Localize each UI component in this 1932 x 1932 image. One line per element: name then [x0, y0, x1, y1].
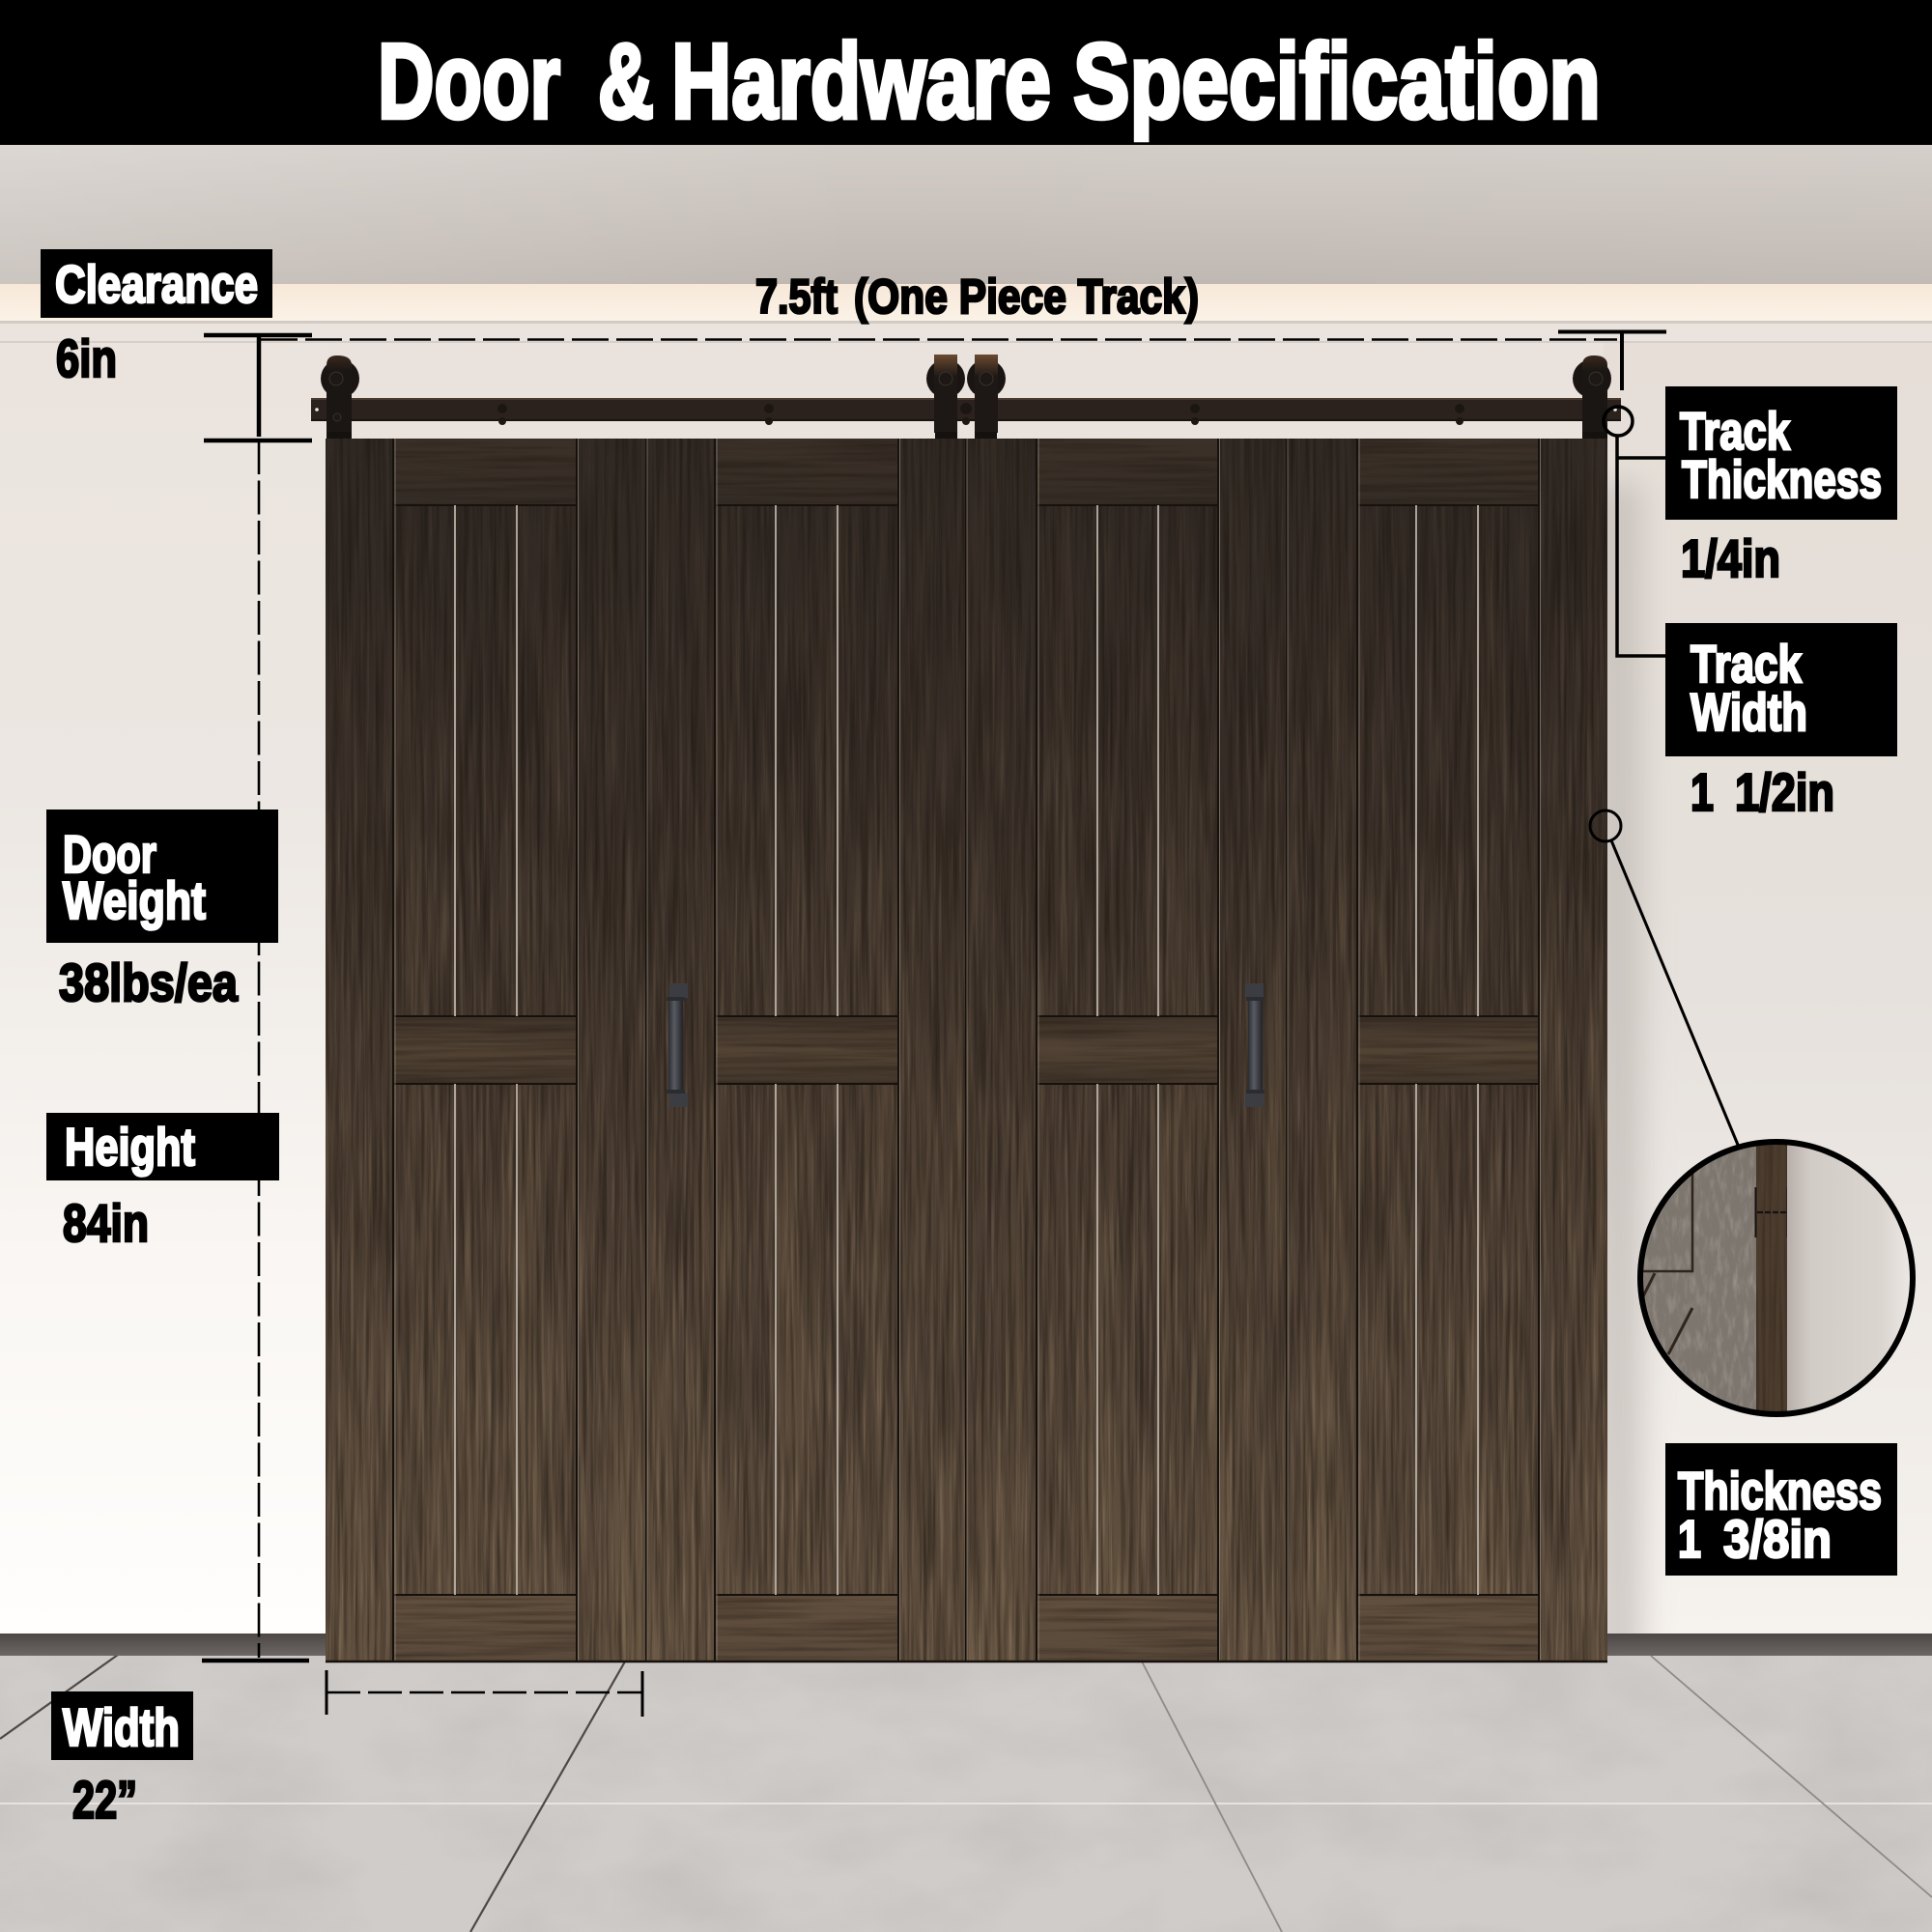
- track length label: [755, 270, 1199, 324]
- label: thickness: Thickness: [1678, 1461, 1882, 1520]
- label: track width: Track: [1690, 634, 1802, 694]
- value: height: 84in: [63, 1193, 149, 1253]
- label: height: [46, 1113, 279, 1180]
- icon: hanger 4: [1573, 355, 1611, 439]
- track length label: (One Piece Track): [854, 270, 1199, 324]
- value: track width: 1: [1690, 762, 1714, 822]
- track length dimension line: [261, 332, 1666, 390]
- label: track thickness: Track: [1680, 401, 1790, 461]
- baseboard: [0, 1634, 1932, 1656]
- label: door weight: Weight: [63, 870, 206, 930]
- value: track thickness: 1/4in: [1681, 528, 1780, 588]
- barn door track: [311, 398, 1621, 425]
- icon: hanger 1: [321, 355, 359, 439]
- label: door weight: Door: [63, 824, 156, 884]
- door 1: [393, 439, 647, 1662]
- title: Hardware: [671, 22, 1051, 141]
- track length label: 7.5ft: [755, 270, 838, 324]
- magnified door edge: [1756, 1139, 1787, 1417]
- magnified wall: [1787, 1146, 1901, 1410]
- clearance dimension line: [204, 335, 312, 440]
- label: thickness: 1: [1678, 1509, 1701, 1569]
- value: track width: 1/2in: [1735, 762, 1834, 822]
- track detail callout circle and connectors: [1604, 407, 1665, 656]
- label: height: Height: [65, 1117, 195, 1177]
- value: door weight: 38lbs/ea: [59, 952, 238, 1012]
- label: width: Width: [63, 1697, 180, 1757]
- door 2: [715, 439, 967, 1662]
- label: track width: Width: [1690, 682, 1807, 742]
- value: width: 22”: [72, 1770, 137, 1830]
- door thickness magnified detail: [1633, 1139, 1918, 1417]
- label: door weight: [46, 810, 278, 943]
- door 3: [1037, 439, 1288, 1662]
- door wood surface: [326, 439, 1607, 1662]
- label: track thickness: [1665, 386, 1897, 520]
- ceiling and cove light: [0, 145, 1932, 343]
- header band: [0, 0, 1932, 145]
- door edge callout circle and leader: [1590, 810, 1738, 1145]
- title: Door: [378, 22, 560, 141]
- icon: door handle left: [667, 983, 688, 1107]
- icon: door handle right: [1245, 983, 1264, 1107]
- label: thickness: [1665, 1443, 1897, 1576]
- floor: [0, 1655, 1932, 1932]
- value: clearance: 6in: [56, 328, 117, 388]
- title: &: [598, 22, 654, 141]
- title: Specification: [1073, 22, 1601, 141]
- height dimension line: [202, 440, 309, 1661]
- label: thickness: 3/8in: [1723, 1509, 1832, 1569]
- label: track width: [1665, 623, 1897, 756]
- icon: hanger 3: [967, 355, 1006, 439]
- width dimension line: [327, 1670, 642, 1717]
- icon: hanger 2: [926, 355, 965, 439]
- wall background: [0, 342, 1932, 1671]
- door 4: [1357, 439, 1540, 1662]
- label: clearance: Clearance: [55, 254, 258, 314]
- value: track width: [1690, 762, 1834, 822]
- title: [378, 22, 1601, 141]
- magnified door face: [1643, 1146, 1756, 1410]
- door bottom edge: [326, 1661, 1607, 1662]
- barn doors: [326, 439, 1607, 1662]
